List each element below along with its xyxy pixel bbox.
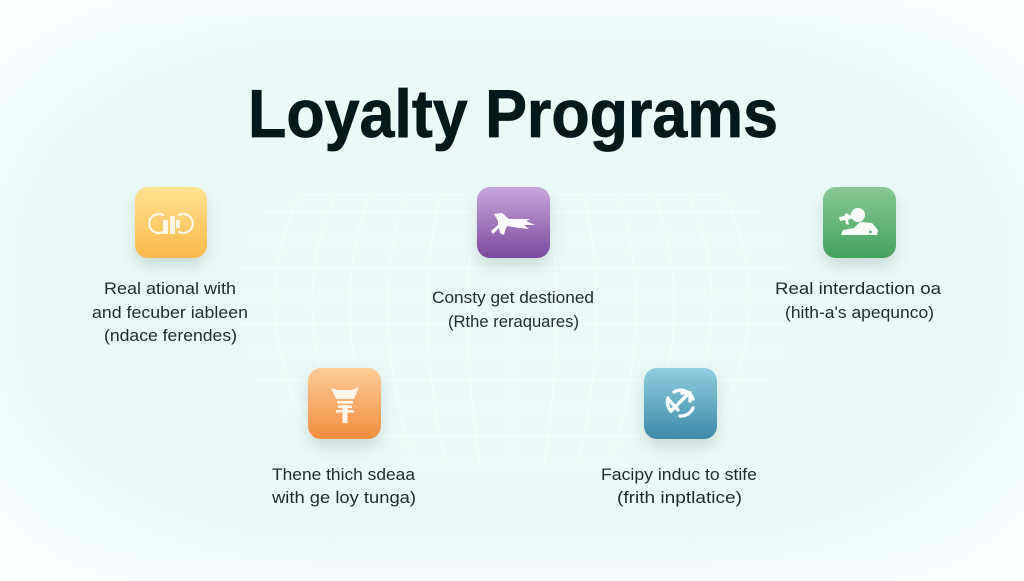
text block: Thene thich sdeaa [272, 465, 416, 484]
text block: (Rthe reraquares) [448, 312, 579, 331]
panel: yellow item [92, 187, 248, 345]
icon: purple rounded badge [477, 187, 550, 258]
icon: blue rounded badge [644, 368, 717, 439]
text block: and fecuber iableen [92, 303, 248, 322]
title: Loyalty Programs [248, 76, 778, 152]
text block [92, 279, 248, 345]
text block: (frith inptlatice) [617, 488, 742, 507]
text block: Facipy induc to stife [601, 465, 757, 484]
icon: yellow rounded badge [135, 187, 207, 258]
text block: Real ational with [104, 279, 236, 298]
panel: green item [775, 187, 942, 322]
text block: with ge loy tunga) [271, 488, 416, 507]
text block: (hith-a's apequnco) [785, 303, 934, 322]
text block: Consty get destioned [432, 288, 594, 307]
text block [271, 465, 416, 507]
text block: Real interdaction oa [775, 279, 942, 298]
icon: orange rounded badge [308, 368, 381, 439]
panel: blue item [601, 368, 757, 507]
text block [775, 279, 942, 322]
panel: orange item [271, 368, 416, 507]
text block: (ndace ferendes) [104, 326, 237, 345]
panel: purple item [432, 187, 594, 331]
text block [601, 465, 757, 507]
icon: green rounded badge [823, 187, 896, 258]
text block [432, 288, 594, 331]
